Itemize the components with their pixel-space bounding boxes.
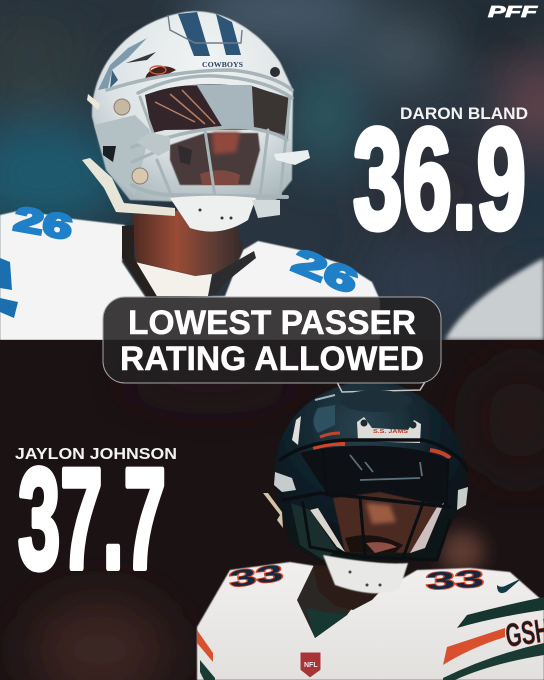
side clips (274, 472, 296, 492)
title box (103, 297, 441, 383)
bottom panel: Jaylon Johnson background (16, 384, 538, 680)
snaps (114, 99, 130, 115)
face (170, 133, 260, 185)
jersey: NFL (304, 662, 318, 669)
straps (82, 158, 175, 216)
visor (145, 84, 290, 140)
visor clip (274, 150, 310, 165)
face (333, 492, 437, 553)
title: LOWEST PASSER (128, 304, 416, 342)
helmet (82, 11, 310, 232)
number 33 right: 33 (425, 566, 485, 595)
NFL shield (300, 652, 321, 678)
shell (275, 380, 467, 562)
star (98, 38, 147, 90)
side panels (310, 508, 345, 552)
shell (92, 11, 293, 205)
navy stripes (178, 12, 241, 56)
title (120, 304, 424, 378)
shell highlights (292, 416, 301, 445)
chin cup (170, 196, 256, 232)
logo wordmark: COWBOYS (202, 60, 243, 69)
facemask (107, 70, 292, 197)
top panel: Daron Bland background (0, 0, 544, 340)
player photo: Jaylon Johnson (197, 380, 544, 680)
ear hole (103, 146, 116, 162)
facemask (280, 440, 467, 560)
orange accents (313, 444, 345, 448)
jersey (0, 200, 380, 340)
jersey: 26 (11, 200, 75, 247)
collar (297, 567, 353, 638)
player name: Jaylon Johnson: JAYLON JOHNSON (15, 446, 177, 463)
stat: 37.7: 37.7 (18, 440, 166, 599)
lower shell shadow (94, 115, 150, 174)
top bumper (357, 417, 421, 443)
neck (313, 565, 379, 610)
neck (132, 205, 243, 276)
oakley patch (145, 66, 176, 78)
nike swoosh (497, 578, 522, 593)
PFF logo: PFF (488, 4, 538, 21)
sleeve stripes (457, 597, 544, 628)
blurred white figure, right (445, 258, 544, 340)
visor (300, 446, 447, 503)
number 33 left: 33 (228, 559, 285, 592)
helmet (263, 380, 468, 593)
player photo: Daron Bland (0, 11, 380, 340)
jersey: 26 (287, 242, 363, 302)
jersey (197, 559, 544, 680)
chin cup (323, 555, 408, 593)
helmet: S.S. JAMS (373, 429, 408, 435)
player name: Daron Bland: DARON BLAND (400, 104, 528, 123)
title: RATING ALLOWED (120, 340, 424, 378)
